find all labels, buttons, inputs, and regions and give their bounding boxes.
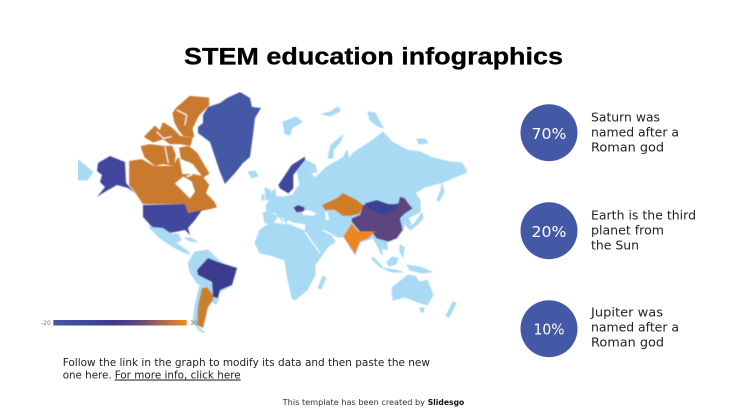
white inland seas bbox=[302, 210, 332, 253]
text: Earth: planet from bbox=[591, 223, 664, 237]
note text: For more info, click here bbox=[115, 370, 241, 382]
country: USA bbox=[143, 204, 202, 235]
text: Jupiter bbox=[590, 306, 679, 350]
legend gradient bar bbox=[53, 320, 187, 326]
text: Earth: Earth is the third bbox=[591, 208, 696, 222]
legend max label: 30 bbox=[190, 320, 198, 327]
country: Argentina bbox=[197, 287, 213, 328]
country: Greenland bbox=[198, 92, 261, 184]
country: Canada bbox=[130, 97, 216, 215]
value 20%: 20% bbox=[532, 223, 566, 241]
circle 20% bbox=[520, 202, 578, 259]
footer credit: This template has been created by bbox=[282, 398, 425, 407]
country: China bbox=[352, 197, 413, 242]
country: Mongolia bbox=[365, 200, 399, 215]
value 10%: 10% bbox=[534, 320, 564, 338]
text: Earth bbox=[591, 208, 696, 252]
text: Saturn: Roman god bbox=[591, 141, 664, 155]
country: Kazakhstan bbox=[322, 193, 364, 216]
country: Sweden and Norway bbox=[278, 157, 305, 193]
country: Romania bbox=[293, 205, 305, 212]
light blue countries bbox=[78, 107, 467, 333]
text: Saturn: Saturn was bbox=[591, 111, 660, 125]
legend min label: -20 bbox=[41, 320, 51, 327]
stat: 10% bbox=[520, 300, 679, 357]
footer credit: Slidesgo bbox=[428, 398, 465, 407]
text: Earth: the Sun bbox=[591, 238, 639, 252]
circle 10% bbox=[520, 300, 578, 357]
stat: 70% bbox=[520, 104, 679, 161]
world map bbox=[78, 92, 467, 333]
note text: one here. bbox=[63, 370, 112, 382]
circle 70% bbox=[520, 104, 578, 161]
country: Brazil bbox=[197, 258, 237, 298]
note text: Follow the link in the graph to modify its data and then paste the new bbox=[63, 357, 430, 369]
text: Saturn bbox=[591, 111, 679, 155]
country: India bbox=[343, 223, 375, 254]
text: Saturn: named after a bbox=[591, 126, 679, 140]
title: STEM education infographics bbox=[184, 44, 563, 70]
value 70%: 70% bbox=[532, 125, 566, 143]
country: Alaska bbox=[97, 156, 135, 197]
stat: 20% bbox=[520, 202, 696, 259]
legend bbox=[41, 320, 198, 327]
text: Jupiter: named after a bbox=[591, 321, 679, 335]
note text bbox=[63, 357, 430, 382]
text: Jupiter: Jupiter was bbox=[590, 306, 663, 320]
text: Jupiter: Roman god bbox=[591, 336, 664, 350]
